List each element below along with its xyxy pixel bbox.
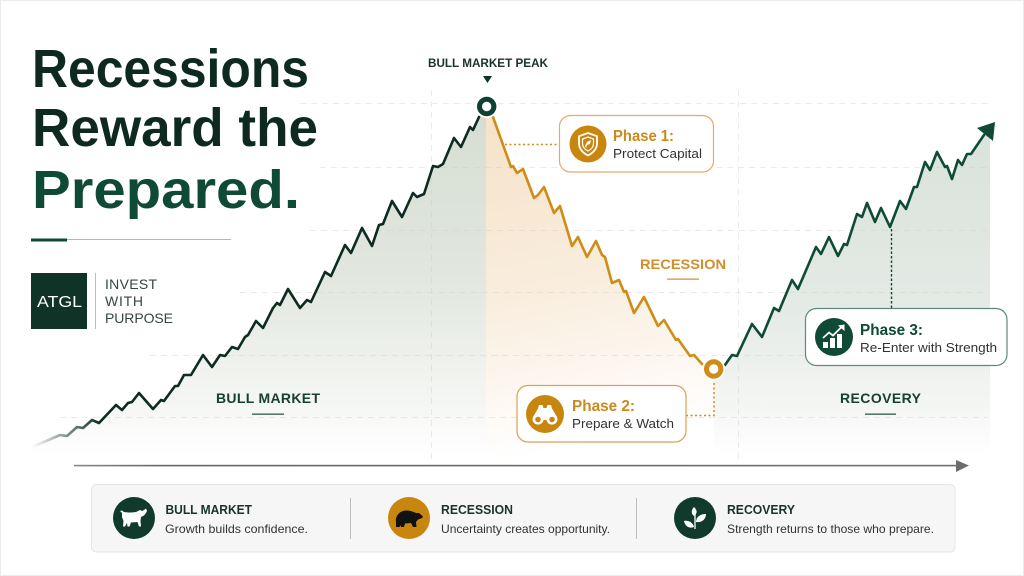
bull market chart label: BULL MARKET: [216, 390, 320, 406]
callout: phase 2: [517, 386, 686, 442]
callout: phase 2: Phase 2:: [572, 398, 635, 415]
area fill: recession: [486, 106, 714, 456]
icon: rising bar chart: [815, 318, 853, 356]
connector: phase 3: [890, 229, 892, 308]
callout: phase 1: [560, 116, 714, 172]
area fill: recovery: [714, 128, 990, 456]
time axis arrow: [74, 460, 969, 472]
recession label: [640, 256, 726, 280]
title: Recessions: [32, 39, 309, 99]
logo: ATGL invest with purpose: WITH: [105, 293, 143, 309]
connector: phase 2: [686, 381, 714, 416]
bull market price line: [32, 117, 479, 447]
logo: ATGL invest with purpose: PURPOSE: [105, 310, 173, 326]
recession label: RECESSION: [640, 256, 726, 272]
recovery chart label: [840, 390, 922, 415]
recovery price line with arrow: [725, 122, 995, 365]
trough marker: [702, 358, 725, 380]
callout: phase 1: Phase 1:: [613, 128, 674, 145]
legend item: recession: Uncertainty creates opportunity.: [441, 522, 610, 536]
icon: sprout: [674, 497, 716, 539]
peak marker: [475, 95, 498, 118]
logo: ATGL invest with purpose: [31, 273, 173, 329]
recession price line: [493, 117, 702, 364]
title: [32, 39, 318, 220]
icon: bull: [113, 497, 155, 539]
bull market chart label: [216, 390, 320, 415]
legend item: recession: [388, 497, 610, 539]
callout: phase 2: Prepare & Watch: [572, 416, 674, 431]
area fill: bull market: [32, 106, 486, 456]
legend item: recovery: Strength returns to those who prepare.: [727, 522, 934, 536]
title divider: [31, 238, 231, 242]
legend item: bull market: Growth builds confidence.: [165, 522, 308, 536]
legend panel: [92, 484, 955, 552]
connector: phase 1: [505, 144, 559, 146]
title: Prepared.: [32, 160, 300, 220]
callout: phase 3: Phase 3:: [860, 322, 923, 339]
logo: ATGL invest with purpose: INVEST: [105, 276, 157, 292]
recovery chart label: RECOVERY: [840, 390, 922, 406]
logo: ATGL invest with purpose: ATGL: [37, 294, 82, 311]
callout: phase 3: Re-Enter with Strength: [860, 340, 997, 355]
legend item: bull market: BULL MARKET: [166, 503, 252, 517]
bull market peak label: BULL MARKET PEAK: [428, 56, 548, 70]
bull market peak label: [428, 56, 548, 83]
icon: binoculars: [526, 395, 564, 433]
icon: bear: [388, 497, 430, 539]
icon: shield: [570, 126, 606, 162]
callout: phase 3: [806, 308, 1007, 366]
legend item: recession: RECESSION: [441, 503, 513, 517]
legend item: bull market: [113, 497, 308, 539]
title: Reward the: [32, 98, 318, 158]
legend item: recovery: RECOVERY: [727, 503, 796, 517]
callout: phase 1: Protect Capital: [613, 146, 702, 161]
legend item: recovery: [674, 497, 934, 539]
